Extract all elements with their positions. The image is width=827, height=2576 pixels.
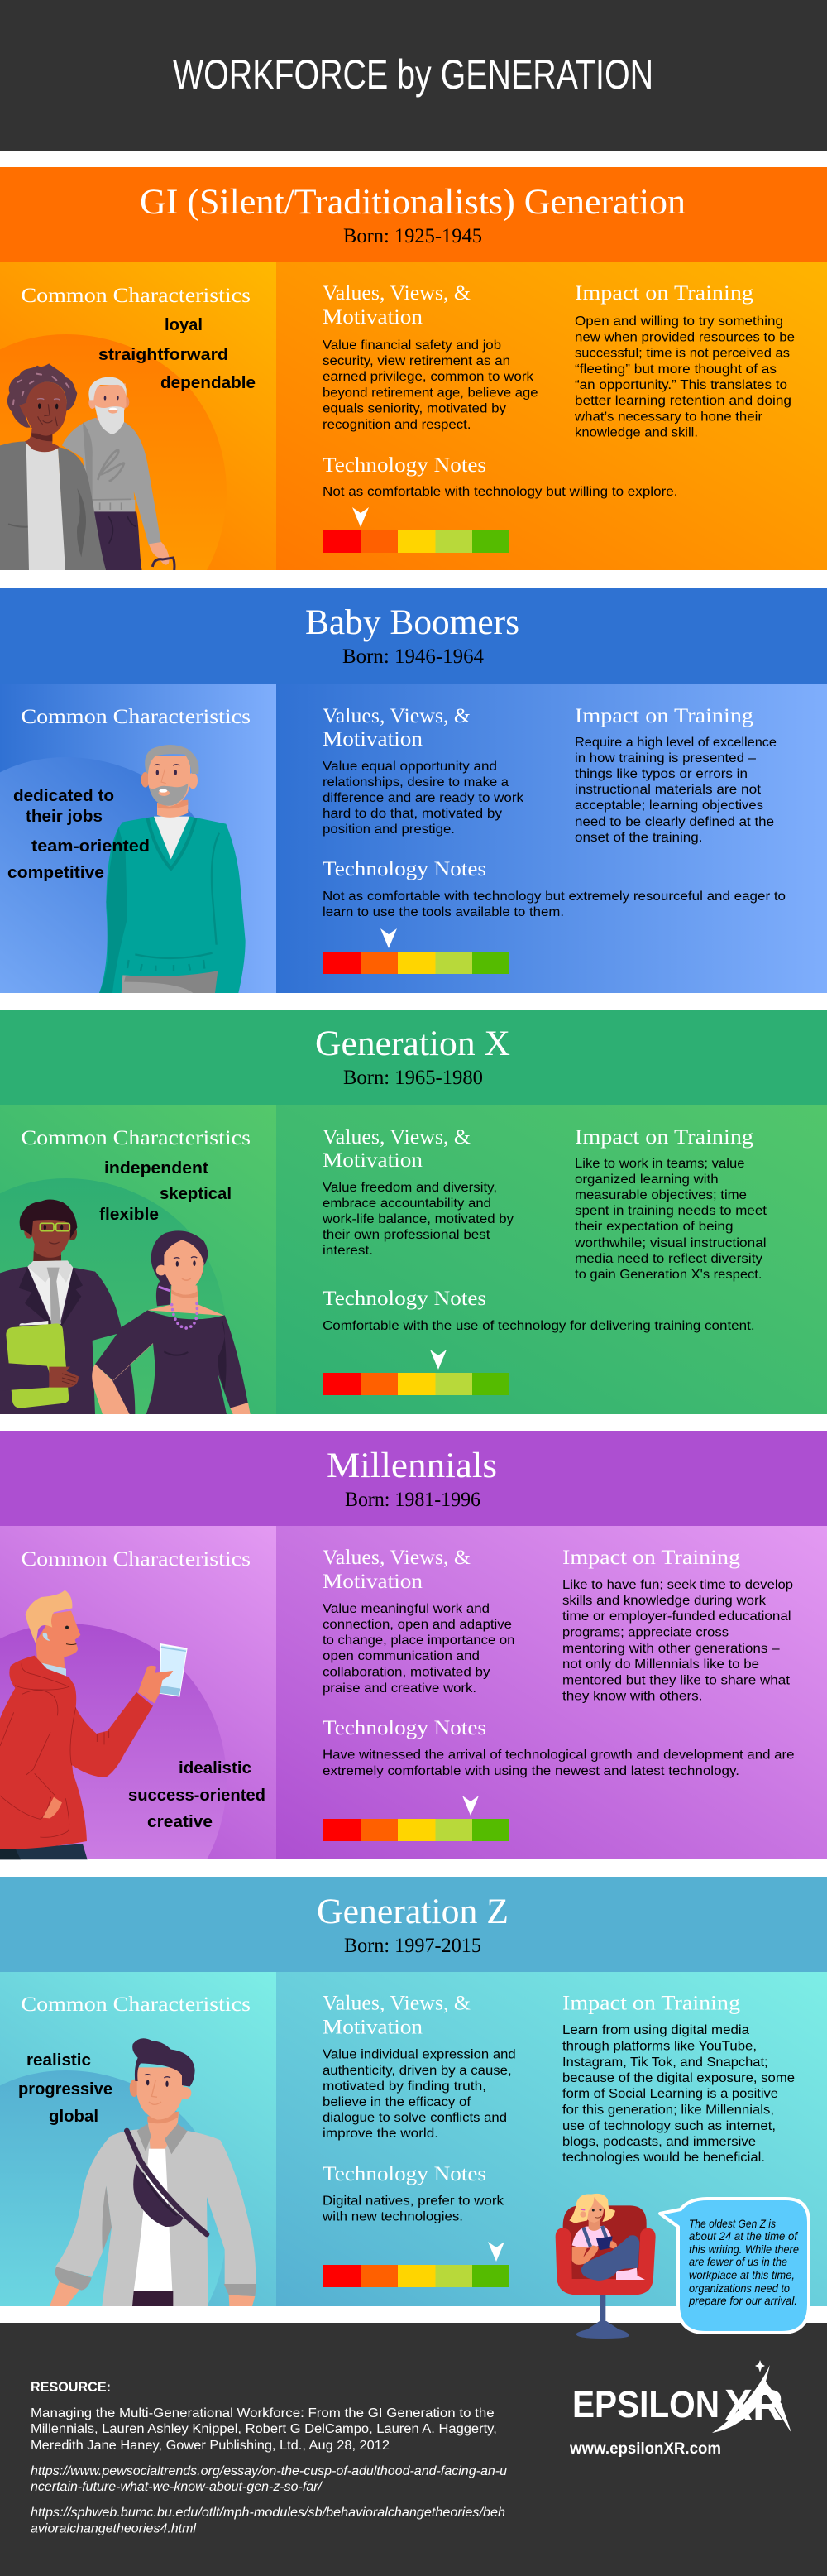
callout: Gen Z speech bubble: organizations need to [689, 2281, 790, 2295]
Gen Z impact column: Learn from using digital media [562, 2023, 749, 2037]
GI heading and keywords: loyal [165, 316, 203, 334]
Boomers values column: position and prestige. [323, 823, 455, 837]
resources text: Managing the Multi-Generational Workforce: From the GI Generation to the [31, 2406, 495, 2420]
GI header band [0, 167, 827, 262]
Gen X heading and keywords: flexible [99, 1206, 159, 1224]
Boomers values column: hard to do that, motivated by [323, 807, 502, 821]
Gen X technology scale [323, 1350, 509, 1395]
icon: man in red hoodie with phone [0, 1590, 188, 1859]
Boomers impact column: onset of the training. [575, 831, 703, 845]
callout: Gen Z speech bubble: this writing. While there [689, 2243, 799, 2256]
Gen Z header band: Generation Z [317, 1892, 509, 1931]
Millennials values column [323, 1547, 514, 1696]
Millennials technology scale [323, 1796, 509, 1841]
Gen X heading and keywords: Common Characteristics [22, 1127, 251, 1149]
Boomers heading and keywords: their jobs [26, 808, 103, 826]
GI details panel [276, 262, 827, 570]
Gen X impact column: worthwhile; visual instructional [574, 1236, 767, 1250]
resources text: Millennials, Lauren Ashley Knippel, Robert G DelCampo, Lauren A. Haggerty, [31, 2422, 497, 2436]
Millennials header band: Millennials [327, 1446, 497, 1485]
GI values column: earned privilege, common to work [323, 370, 533, 384]
Gen X impact column: to gain Generation X's respect. [575, 1268, 762, 1282]
Gen Z heading and keywords [18, 1993, 251, 2126]
resources text: Meredith Jane Haney, Gower Publishing, Ltd., Aug 28, 2012 [31, 2439, 390, 2453]
Gen X impact column: media need to reflect diversity [575, 1252, 762, 1266]
Gen Z impact column: for this generation; like Millennials, [562, 2103, 774, 2118]
resources text [31, 2379, 507, 2536]
resources text: ncertain-future-what-we-know-about-gen-z-so-far/ [31, 2480, 323, 2494]
Boomers heading and keywords: dedicated to [13, 787, 114, 805]
Gen X details panel [276, 1105, 827, 1414]
Gen Z heading and keywords: progressive [18, 2080, 112, 2099]
Gen Z values column: Motivation [323, 2016, 423, 2039]
icon: young man with sling bag [50, 2038, 256, 2306]
GI values column [323, 282, 538, 432]
Boomers heading and keywords: team-oriented [31, 837, 150, 856]
Gen Z impact column: blogs, podcasts, and immersive [562, 2135, 756, 2149]
resources text: https://www.pewsocialtrends.org/essay/on-the-cusp-of-adulthood-and-facing-an-u [31, 2464, 507, 2478]
GI values column: Value financial safety and job [323, 338, 501, 353]
Gen X values column: Motivation [323, 1149, 423, 1172]
Boomers values column: Values, Views, & [323, 705, 471, 727]
GI impact column: knowledge and skill. [575, 426, 698, 440]
GI impact column: Open and willing to try something [575, 314, 783, 329]
GI heading and keywords [22, 285, 256, 392]
Gen X values column: embrace accountability and [323, 1197, 491, 1211]
GI values column: Motivation [323, 306, 423, 329]
Millennials impact column: mentored but they like to share what [562, 1673, 791, 1687]
Boomers impact column [575, 705, 777, 845]
GI values column: recognition and respect. [323, 418, 471, 432]
Millennials heading and keywords: creative [147, 1813, 213, 1831]
Gen Z technology scale [323, 2242, 509, 2287]
Boomers characteristics panel [0, 684, 276, 993]
callout: Gen Z speech bubble: are fewer of us in the [689, 2255, 787, 2268]
GI values column: equals seniority, motivated by [323, 402, 506, 416]
panel: Generation Z [0, 1877, 827, 2306]
Gen Z impact column: because of the digital exposure, some [562, 2071, 795, 2085]
Boomers technology notes: Not as comfortable with technology but extremely resourceful and eager to [323, 890, 786, 904]
Millennials technology notes: extremely comfortable with using the newest and latest technology. [323, 1764, 739, 1778]
callout: Gen Z speech bubble: about 24 at the time of [689, 2229, 799, 2243]
Gen X values column: Values, Views, & [323, 1126, 471, 1149]
Gen Z values column [323, 1993, 516, 2141]
GI impact column: better learning retention and doing [575, 394, 791, 408]
callout: Gen Z speech bubble: The oldest Gen Z is [689, 2217, 776, 2230]
Gen X impact column: organized learning with [575, 1173, 719, 1187]
GI header band: GI (Silent/Traditionalists) Generation [140, 183, 686, 222]
resources text: https://sphweb.bumc.bu.edu/otlt/mph-modules/sb/behavioralchangetheories/beh [31, 2506, 505, 2520]
GI impact column: successful; time is not perceived as [575, 347, 790, 361]
Millennials values column: praise and creative work. [323, 1681, 476, 1696]
panel: GI generation [0, 167, 827, 571]
Boomers header band [0, 588, 827, 684]
Millennials values column: collaboration, motivated by [323, 1665, 490, 1679]
Gen Z heading and keywords: global [49, 2108, 98, 2126]
Millennials details panel [276, 1526, 827, 1859]
Millennials values column: connection, open and adaptive [323, 1618, 512, 1632]
Millennials impact column: they know with others. [562, 1689, 703, 1703]
GI impact column: “an opportunity.” This translates to [575, 378, 787, 392]
Gen Z impact column: Impact on Training [562, 1993, 741, 2015]
Gen X impact column: spent in training needs to meet [575, 1204, 767, 1218]
Millennials technology notes [323, 1717, 794, 1778]
callout: Gen Z speech bubble: workplace at this time, [689, 2268, 795, 2281]
Millennials values column: Motivation [323, 1571, 423, 1593]
Boomers header band: Born: 1946-1964 [342, 645, 484, 668]
GI technology notes: Not as comfortable with technology but willing to explore. [323, 485, 678, 499]
GI values column: Values, Views, & [323, 282, 471, 305]
Boomers impact column: in how training is presented – [575, 751, 756, 765]
Gen Z technology notes: Technology Notes [323, 2163, 486, 2185]
Gen Z technology notes: Digital natives, prefer to work [323, 2195, 504, 2209]
Boomers heading and keywords: competitive [7, 864, 104, 882]
Boomers values column: difference and are ready to work [323, 791, 523, 805]
Gen X impact column [574, 1126, 767, 1282]
Gen X heading and keywords: independent [104, 1159, 208, 1178]
Millennials header band [0, 1431, 827, 1526]
callout: Gen Z speech bubble [660, 2199, 809, 2333]
Gen Z values column: Values, Views, & [323, 1993, 471, 2015]
Gen Z header band: Born: 1997-2015 [344, 1935, 481, 1957]
icon: girl in red chair [556, 2194, 656, 2339]
GI impact column: what’s necessary to hone their [574, 410, 762, 424]
GI values column: security, view retirement as an [323, 354, 510, 368]
Boomers header band: Baby Boomers [305, 603, 519, 642]
GI values column: beyond retirement age, believe age [323, 386, 538, 401]
Gen X characteristics panel [0, 1105, 276, 1414]
Millennials values column: Value meaningful work and [323, 1602, 490, 1616]
resources text: RESOURCE: [31, 2379, 111, 2395]
Gen Z characteristics panel [0, 1972, 276, 2306]
Boomers details panel [276, 684, 827, 993]
Millennials values column: open communication and [323, 1649, 480, 1663]
GI technology scale [323, 507, 509, 553]
Boomers technology scale [323, 928, 509, 974]
Gen Z values column: believe in the efficacy of [323, 2095, 471, 2109]
GI impact column: “fleeting” but more thought of as [575, 362, 777, 377]
panel: Generation X [0, 1010, 827, 1414]
Gen X header band: Born: 1965-1980 [343, 1067, 483, 1089]
Boomers technology notes: Technology Notes [323, 858, 486, 880]
EpsilonXR logo [569, 2360, 791, 2458]
Boomers impact column: acceptable; learning objectives [575, 799, 763, 813]
Gen Z values column: Value individual expression and [323, 2047, 516, 2062]
footer panel [0, 2323, 827, 2576]
Gen Z impact column: use of technology such as internet, [562, 2119, 776, 2133]
Millennials impact column: skills and knowledge during work [562, 1594, 766, 1608]
GI impact column: Impact on Training [575, 282, 754, 305]
Gen X impact column: measurable objectives; time [575, 1188, 747, 1202]
Gen Z values column: authenticity, driven by a cause, [323, 2064, 512, 2078]
Boomers impact column: instructional materials are not [575, 783, 762, 797]
GI heading and keywords: straightforward [98, 346, 228, 364]
icon: older couple illustration [0, 363, 174, 571]
EpsilonXR logo: EPSILON [572, 2383, 719, 2425]
GI technology notes: Technology Notes [323, 454, 486, 477]
EpsilonXR logo: www.epsilonXR.com [569, 2440, 721, 2458]
Boomers impact column: things like typos or errors in [575, 767, 748, 781]
Millennials technology notes: Technology Notes [323, 1717, 486, 1739]
Millennials characteristics panel [0, 1526, 276, 1859]
callout: Gen Z speech bubble: prepare for our arrival. [688, 2294, 797, 2307]
Gen X technology notes: Technology Notes [323, 1288, 486, 1310]
GI impact column [574, 282, 795, 440]
Boomers values column: relationships, desire to make a [323, 775, 509, 789]
Millennials impact column: mentoring with other generations – [562, 1642, 780, 1656]
Gen Z details panel [276, 1972, 827, 2306]
Millennials values column: Values, Views, & [323, 1547, 471, 1569]
Millennials values column: to change, place importance on [323, 1633, 514, 1648]
Boomers impact column: Require a high level of excellence [575, 736, 777, 750]
Gen X heading and keywords [22, 1127, 251, 1224]
Millennials impact column: Like to have fun; seek time to develop [562, 1578, 793, 1592]
Millennials impact column: Impact on Training [562, 1547, 741, 1569]
Gen X values column: their own professional best [323, 1228, 490, 1242]
Boomers heading and keywords: Common Characteristics [22, 706, 251, 728]
Gen Z impact column: technologies would be beneficial. [562, 2151, 765, 2165]
Gen Z impact column: form of Social Learning is a positive [562, 2087, 778, 2101]
Gen Z technology notes: with new technologies. [322, 2210, 463, 2224]
Gen X header band [0, 1010, 827, 1105]
icon: man in teal sweater [99, 745, 246, 993]
Gen X header band: Generation X [315, 1024, 510, 1063]
title banner [0, 0, 827, 151]
Gen X values column [322, 1126, 514, 1258]
GI heading and keywords: dependable [160, 374, 256, 392]
panel: Millennials [0, 1431, 827, 1859]
resources text: avioralchangetheories4.html [31, 2522, 197, 2536]
Boomers values column: Motivation [323, 728, 423, 751]
Gen X values column: work-life balance, motivated by [322, 1212, 514, 1226]
Gen X values column: Value freedom and diversity, [323, 1181, 497, 1195]
Boomers technology notes: learn to use the tools available to them. [323, 905, 564, 919]
Millennials impact column: not only do Millennials like to be [562, 1657, 759, 1672]
Boomers values column [323, 705, 523, 837]
Gen Z heading and keywords: realistic [26, 2051, 91, 2070]
Gen Z impact column: through platforms like YouTube, [562, 2039, 757, 2054]
panel: Baby Boomers [0, 588, 827, 993]
Millennials heading and keywords: Common Characteristics [22, 1548, 251, 1571]
Gen Z header band [0, 1877, 827, 1972]
GI header band: Born: 1925-1945 [343, 225, 482, 247]
Millennials header band: Born: 1981-1996 [345, 1489, 480, 1511]
Gen X heading and keywords: skeptical [160, 1185, 232, 1203]
Millennials heading and keywords [22, 1548, 265, 1831]
Gen X impact column: their expectation of being [575, 1220, 733, 1234]
Gen Z values column: dialogue to solve conflicts and [323, 2111, 507, 2125]
GI characteristics panel [0, 262, 276, 571]
Gen X technology notes: Comfortable with the use of technology for delivering training content. [323, 1319, 755, 1333]
Gen Z impact column [562, 1993, 795, 2165]
Boomers impact column: need to be clearly defined at the [575, 815, 774, 829]
GI impact column: new when provided resources to be [575, 331, 795, 344]
Gen X impact column: Like to work in teams; value [575, 1157, 744, 1171]
Millennials impact column [562, 1547, 793, 1703]
GI technology notes [323, 454, 678, 499]
Boomers heading and keywords [7, 706, 251, 882]
Boomers values column: Value equal opportunity and [323, 760, 497, 774]
Millennials impact column: time or employer-funded educational [562, 1609, 791, 1624]
Millennials heading and keywords: success-oriented [128, 1787, 265, 1805]
EpsilonXR logo: XR [724, 2381, 783, 2430]
icon: business couple illustration [0, 1200, 251, 1414]
Gen X technology notes [323, 1288, 755, 1333]
Millennials heading and keywords: idealistic [179, 1759, 251, 1777]
Gen X values column: interest. [323, 1244, 373, 1258]
Millennials impact column: programs; appreciate cross [562, 1626, 729, 1640]
Gen Z values column: motivated by finding truth, [323, 2080, 486, 2094]
Boomers technology notes [323, 858, 786, 919]
Gen Z technology notes [322, 2163, 504, 2224]
title: WORKFORCE by GENERATION [173, 51, 653, 98]
GI heading and keywords: Common Characteristics [22, 285, 251, 307]
Gen Z values column: improve the world. [323, 2127, 438, 2141]
Gen Z impact column: Instagram, Tik Tok, and Snapchat; [562, 2056, 768, 2070]
Gen Z heading and keywords: Common Characteristics [22, 1993, 251, 2016]
Millennials technology notes: Have witnessed the arrival of technological growth and development and are [323, 1749, 794, 1763]
Boomers impact column: Impact on Training [575, 705, 754, 727]
Gen X impact column: Impact on Training [575, 1126, 754, 1149]
